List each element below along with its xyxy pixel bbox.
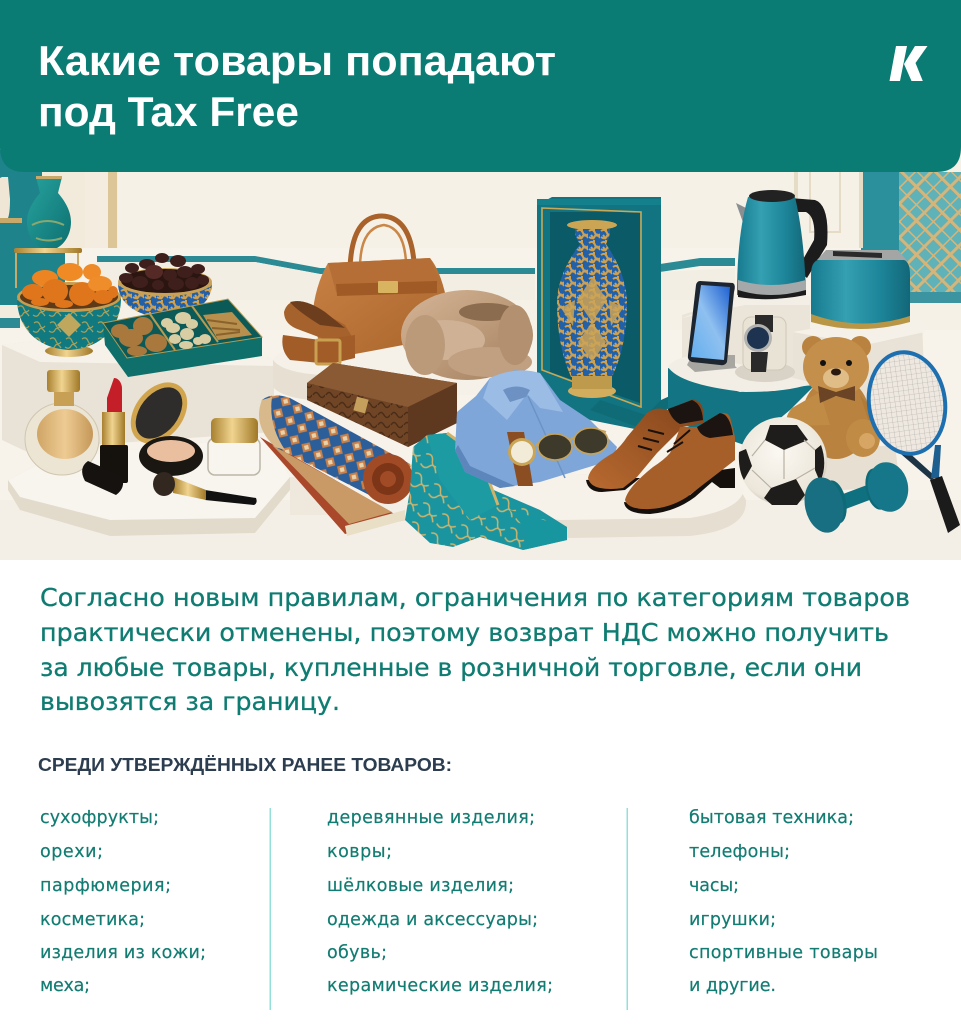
- flat carpet: [260, 437, 405, 536]
- column 1 list: сухофрукты;: [40, 808, 159, 828]
- lower cosmetics platform: [8, 477, 335, 536]
- logo: [890, 46, 928, 81]
- column 2 list: [327, 808, 553, 996]
- title: [38, 37, 556, 135]
- shelf with teal vase: [0, 176, 82, 288]
- brown shoes: [586, 399, 735, 514]
- electric kettle: [736, 190, 828, 299]
- header band: [0, 0, 961, 172]
- column 1 list: парфюмерия;: [40, 876, 171, 896]
- column 1 list: орехи;: [40, 842, 103, 862]
- lipstick cap: [82, 461, 123, 495]
- leather belt: [282, 301, 355, 364]
- title: под Tax Free: [38, 88, 299, 135]
- smartphone: [687, 281, 737, 372]
- column 3 list: игрушки;: [689, 910, 776, 930]
- sunglasses: [536, 428, 608, 460]
- teal vase box: [537, 197, 672, 430]
- column 1 list: изделия из кожи;: [40, 943, 206, 963]
- blue shirt: [455, 370, 617, 488]
- leather handbag: [312, 216, 446, 354]
- right shoe platform: [556, 494, 746, 538]
- ceramic vase: [557, 220, 627, 398]
- column 3 list: и другие.: [689, 976, 776, 996]
- tray of nuts: [103, 299, 262, 377]
- intro paragraph: Согласно новым правилам, ограничения по категориям товаров: [40, 583, 910, 612]
- column 3 list: [689, 808, 878, 996]
- column 2 list: ковры;: [327, 842, 392, 862]
- column 2 list: одежда и аксессуары;: [327, 910, 538, 930]
- column 2 list: керамические изделия;: [327, 976, 553, 996]
- column 1 list: [40, 808, 206, 996]
- dumbbell: [804, 462, 908, 533]
- illustration: goods on display: [0, 150, 961, 560]
- column 2 list: шёлковые изделия;: [327, 876, 514, 896]
- lipstick: [100, 378, 128, 483]
- list heading: СРЕДИ УТВЕРЖДЁННЫХ РАНЕЕ ТОВАРОВ:: [38, 754, 452, 775]
- intro paragraph: [40, 583, 910, 716]
- makeup brush: [153, 472, 257, 505]
- room background: [0, 150, 961, 560]
- fur stole: [401, 290, 533, 380]
- middle low pedestal: [273, 360, 318, 400]
- upper pedestal: [2, 340, 274, 458]
- wrist watch on shirt: [507, 432, 536, 486]
- silk scarf: [405, 433, 567, 550]
- intro paragraph: практически отменены, поэтому возврат НДС можно получить: [40, 618, 889, 647]
- toaster: [811, 250, 910, 329]
- right display stand: [668, 296, 925, 490]
- soccer ball: [739, 417, 827, 505]
- bowl of dates: [118, 253, 212, 318]
- teddy bear: [786, 336, 885, 459]
- perfume bottle: [25, 370, 99, 475]
- column 1 list: меха;: [40, 976, 90, 996]
- compact powder: [130, 382, 203, 476]
- rolled carpet: [259, 395, 413, 504]
- intro paragraph: вывозятся за границу.: [40, 687, 340, 716]
- column 2 list: обувь;: [327, 943, 387, 963]
- column 2 list: деревянные изделия;: [327, 808, 535, 828]
- tennis racket: [862, 347, 960, 533]
- column 1 list: косметика;: [40, 910, 145, 930]
- column 3 list: спортивные товары: [689, 943, 878, 963]
- watch on stand: [735, 315, 795, 382]
- column 3 list: телефоны;: [689, 842, 790, 862]
- bowl of dried apricots: [17, 263, 121, 357]
- cream jar: [208, 418, 260, 475]
- column 3 list: часы;: [689, 876, 739, 896]
- carved wooden box: [307, 363, 457, 447]
- column 3 list: бытовая техника;: [689, 808, 854, 828]
- title: Какие товары попадают: [38, 37, 556, 84]
- intro paragraph: за любые товары, купленные в розничной торговле, если они: [40, 653, 862, 682]
